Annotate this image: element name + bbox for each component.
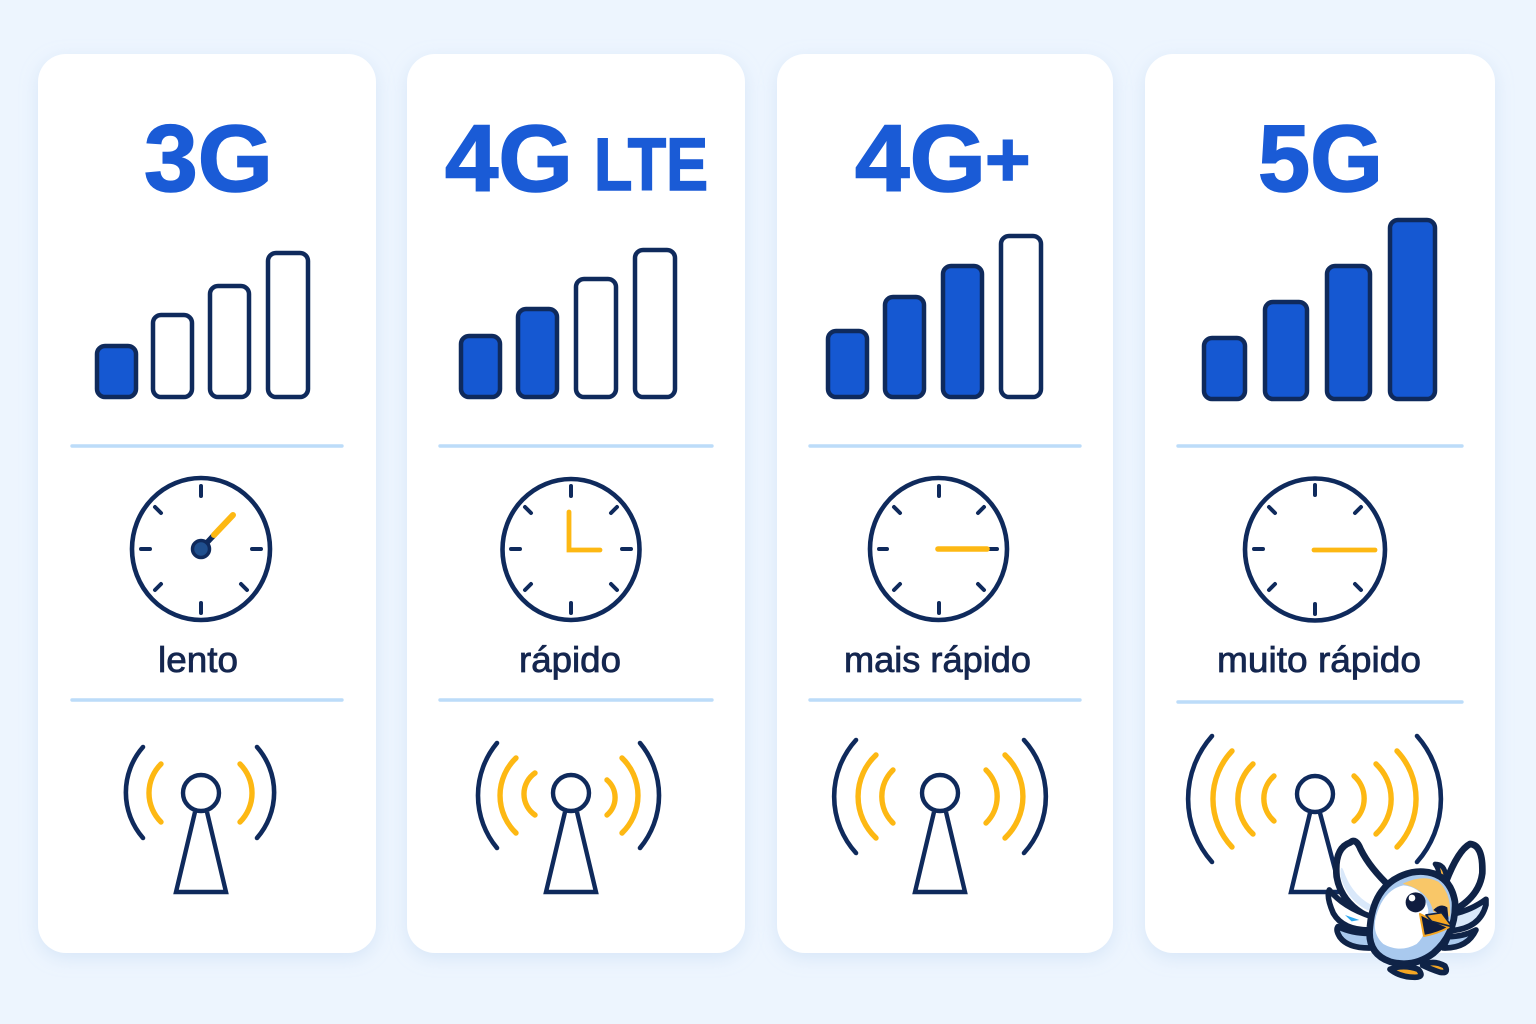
signal bars: 4 of 4 — [1204, 220, 1435, 399]
signal bars: 2 of 4 — [461, 250, 675, 397]
heading: 4G+: 4G — [855, 106, 986, 212]
label: muito rápido: muito rápido — [1217, 639, 1421, 680]
signal bars: 1 of 4 — [97, 253, 308, 397]
label: mais rápido: mais rápido — [844, 639, 1031, 680]
heading: 4G LTE: LTE — [594, 123, 708, 206]
panel: 5G — [1145, 54, 1495, 953]
label: rápido: rápido — [519, 639, 621, 680]
panel: 4G+ — [777, 54, 1113, 953]
icon: faster gauge — [870, 478, 1007, 620]
icon: fastest gauge — [1245, 478, 1385, 620]
icon: antenna with widest waves — [1188, 736, 1441, 892]
panel: 4G LTE — [407, 54, 745, 953]
icon: antenna with one yellow wave — [126, 747, 274, 892]
icon: antenna with medium waves — [478, 743, 659, 892]
mascot: bird — [1328, 841, 1486, 977]
heading: 3G: 3G — [144, 106, 273, 212]
panel: 3G — [38, 54, 376, 953]
heading: 4G LTE — [445, 106, 708, 212]
heading: 4G+: + — [985, 115, 1031, 203]
icon: clock gauge — [502, 479, 640, 620]
label: lento: lento — [158, 639, 238, 680]
heading: 5G: 5G — [1258, 106, 1383, 212]
icon: antenna with wide waves — [834, 740, 1046, 892]
signal bars: 3 of 4 — [828, 236, 1041, 397]
icon: slow gauge — [132, 478, 270, 620]
heading: 4G LTE: 4G — [445, 106, 573, 212]
